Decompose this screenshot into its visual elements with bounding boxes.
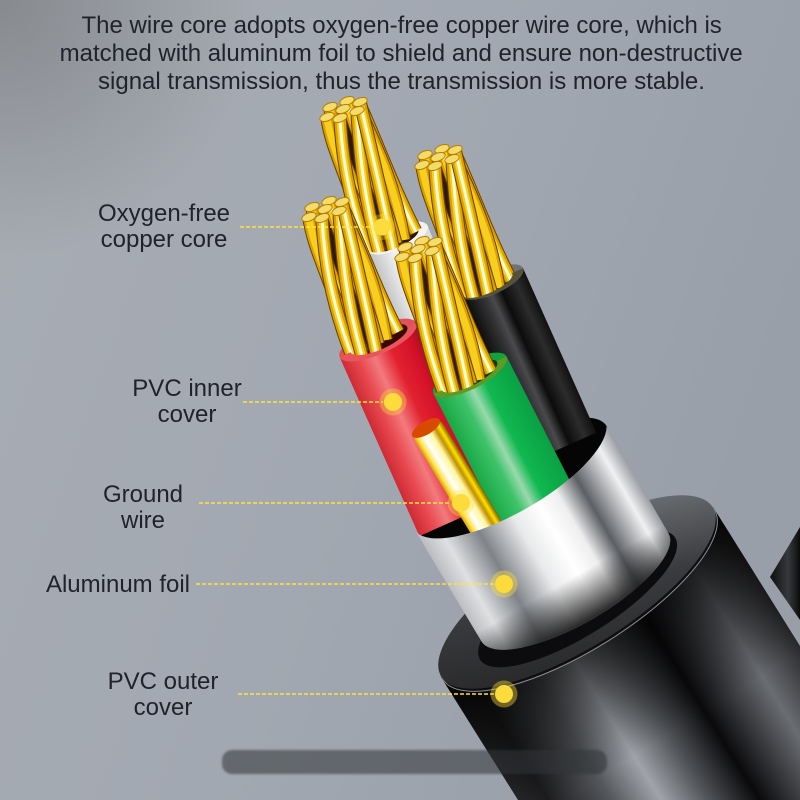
ground wire xyxy=(409,414,503,541)
copper strands: green wire xyxy=(394,235,495,398)
label: PVC outer cover: cover xyxy=(134,694,192,721)
label: ground wire: Ground xyxy=(103,481,183,508)
outer jacket xyxy=(412,461,800,800)
label: ground wire: wire xyxy=(120,507,165,534)
white wire xyxy=(319,95,474,366)
heading text: The wire core adopts oxygen-free copper wire core, which is xyxy=(82,12,722,39)
copper strands: red wire xyxy=(301,195,402,358)
label: oxygen-free copper core: Oxygen-free xyxy=(98,200,230,227)
label: oxygen-free copper core: copper core xyxy=(101,226,227,253)
cable illustration xyxy=(301,95,800,800)
label: PVC inner cover xyxy=(132,375,406,428)
label: aluminum foil xyxy=(46,570,518,598)
bottom shadow bar xyxy=(222,750,607,774)
label: PVC inner cover: PVC inner xyxy=(132,375,242,402)
copper strands: white wire xyxy=(319,95,420,258)
label: ground wire xyxy=(103,481,474,534)
label: aluminum foil: Aluminum foil xyxy=(46,571,190,598)
aluminum foil xyxy=(416,423,687,674)
green wire xyxy=(394,235,584,545)
heading text: matched with aluminum foil to shield and ensure non-destructive xyxy=(60,40,743,67)
label: PVC inner cover: cover xyxy=(158,401,216,428)
copper strands: black wire xyxy=(414,143,515,306)
second cable behind xyxy=(770,527,800,620)
label: PVC outer cover xyxy=(108,668,518,721)
label: oxygen-free copper core xyxy=(98,200,395,253)
label: PVC outer cover: PVC outer xyxy=(108,668,218,695)
heading text: signal transmission, thus the transmission is more stable. xyxy=(98,68,705,95)
red wire xyxy=(301,195,496,536)
black wire xyxy=(414,143,596,460)
foil interior xyxy=(401,395,625,565)
